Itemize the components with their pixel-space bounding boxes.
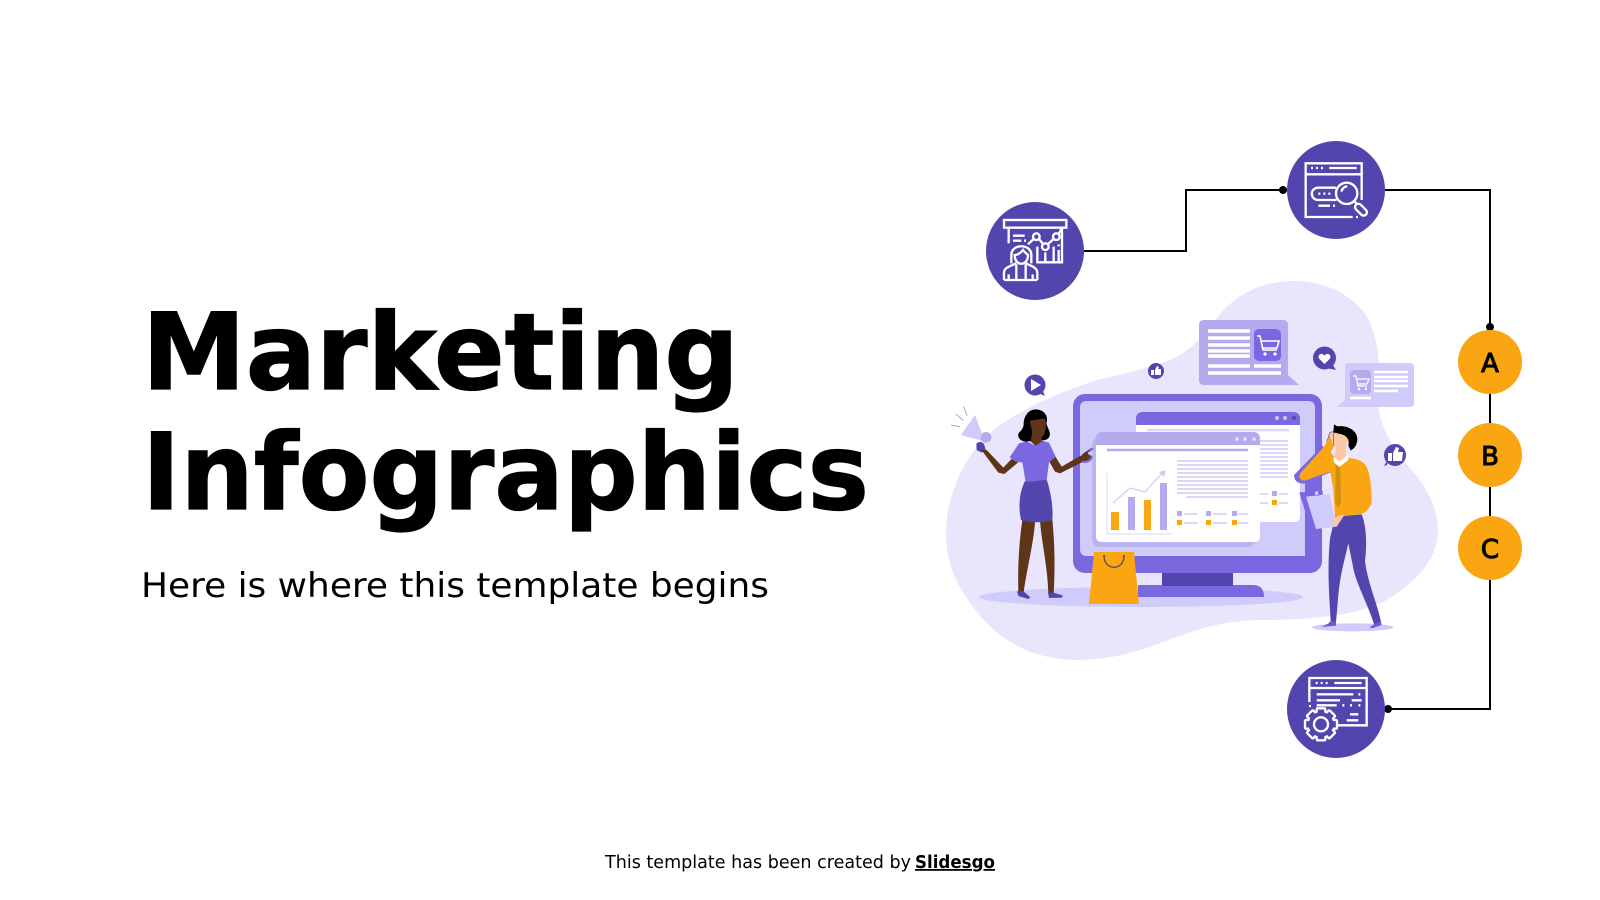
icon: like bubble [1384,444,1406,466]
shopping bag [1089,552,1139,604]
icon: heart bubble [1313,346,1336,370]
title: Infographics [142,411,869,534]
man with clipboard [1294,424,1393,631]
woman with megaphone [951,407,1094,599]
circle B [1458,423,1522,487]
background blob [946,281,1438,660]
circle A: A [1481,349,1499,379]
subtitle: Here is where this template begins [141,566,769,606]
icon: browser search [1287,141,1385,239]
footer credit: This template has been created by [604,852,911,873]
front browser window with chart [1092,432,1260,547]
circle C [1458,516,1522,580]
circle B: B [1481,442,1499,472]
card: small cart listing [1337,363,1414,407]
connector lines [1084,187,1493,712]
back browser window [1136,412,1300,522]
icon: presentation chart [986,202,1084,300]
icon: play bubble [1024,374,1046,396]
illustration: marketing scene [946,281,1438,660]
icon: browser settings [1287,660,1385,758]
title [142,291,869,534]
footer credit: Slidesgo [915,852,995,873]
title: Marketing [142,291,739,414]
icon: like bubble small [1148,363,1164,379]
card: cart listing [1199,320,1299,385]
circle A [1458,330,1522,394]
floor shadow [979,587,1303,607]
monitor [1073,394,1322,597]
circle C: C [1481,535,1499,565]
